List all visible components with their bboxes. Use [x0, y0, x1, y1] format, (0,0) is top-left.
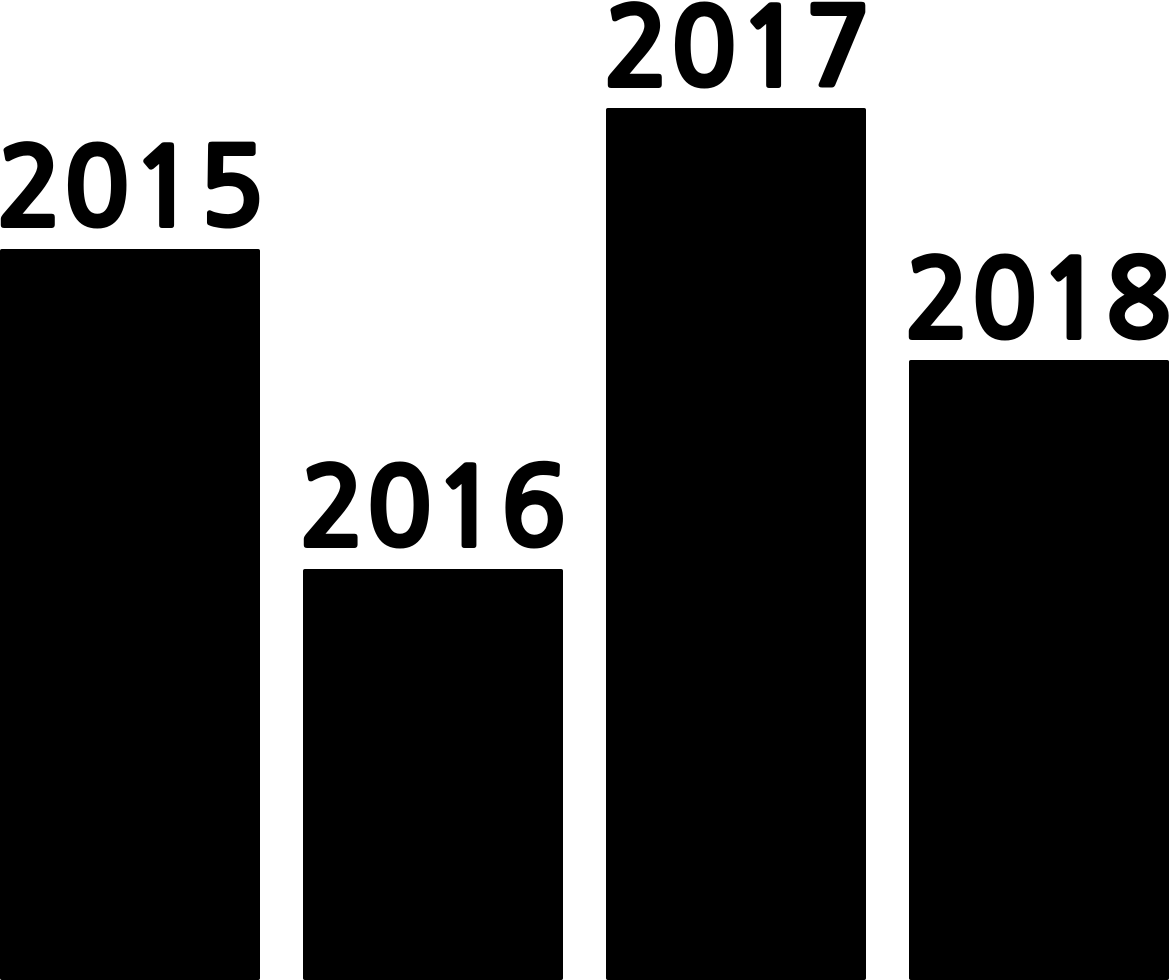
label: 2018: 2018 [904, 247, 1169, 355]
bar group: 2016 [299, 455, 567, 980]
bar group: 2017 [603, 0, 872, 980]
bar: 2016 [303, 569, 563, 980]
bar: 2015 [0, 249, 260, 980]
bar: 2018 [909, 360, 1169, 980]
bar: 2017 [606, 108, 866, 980]
bar group: 2015 [0, 135, 265, 980]
label: 2015: 2015 [0, 135, 265, 243]
label: 2016: 2016 [299, 455, 567, 563]
bar group: 2018 [904, 247, 1169, 980]
